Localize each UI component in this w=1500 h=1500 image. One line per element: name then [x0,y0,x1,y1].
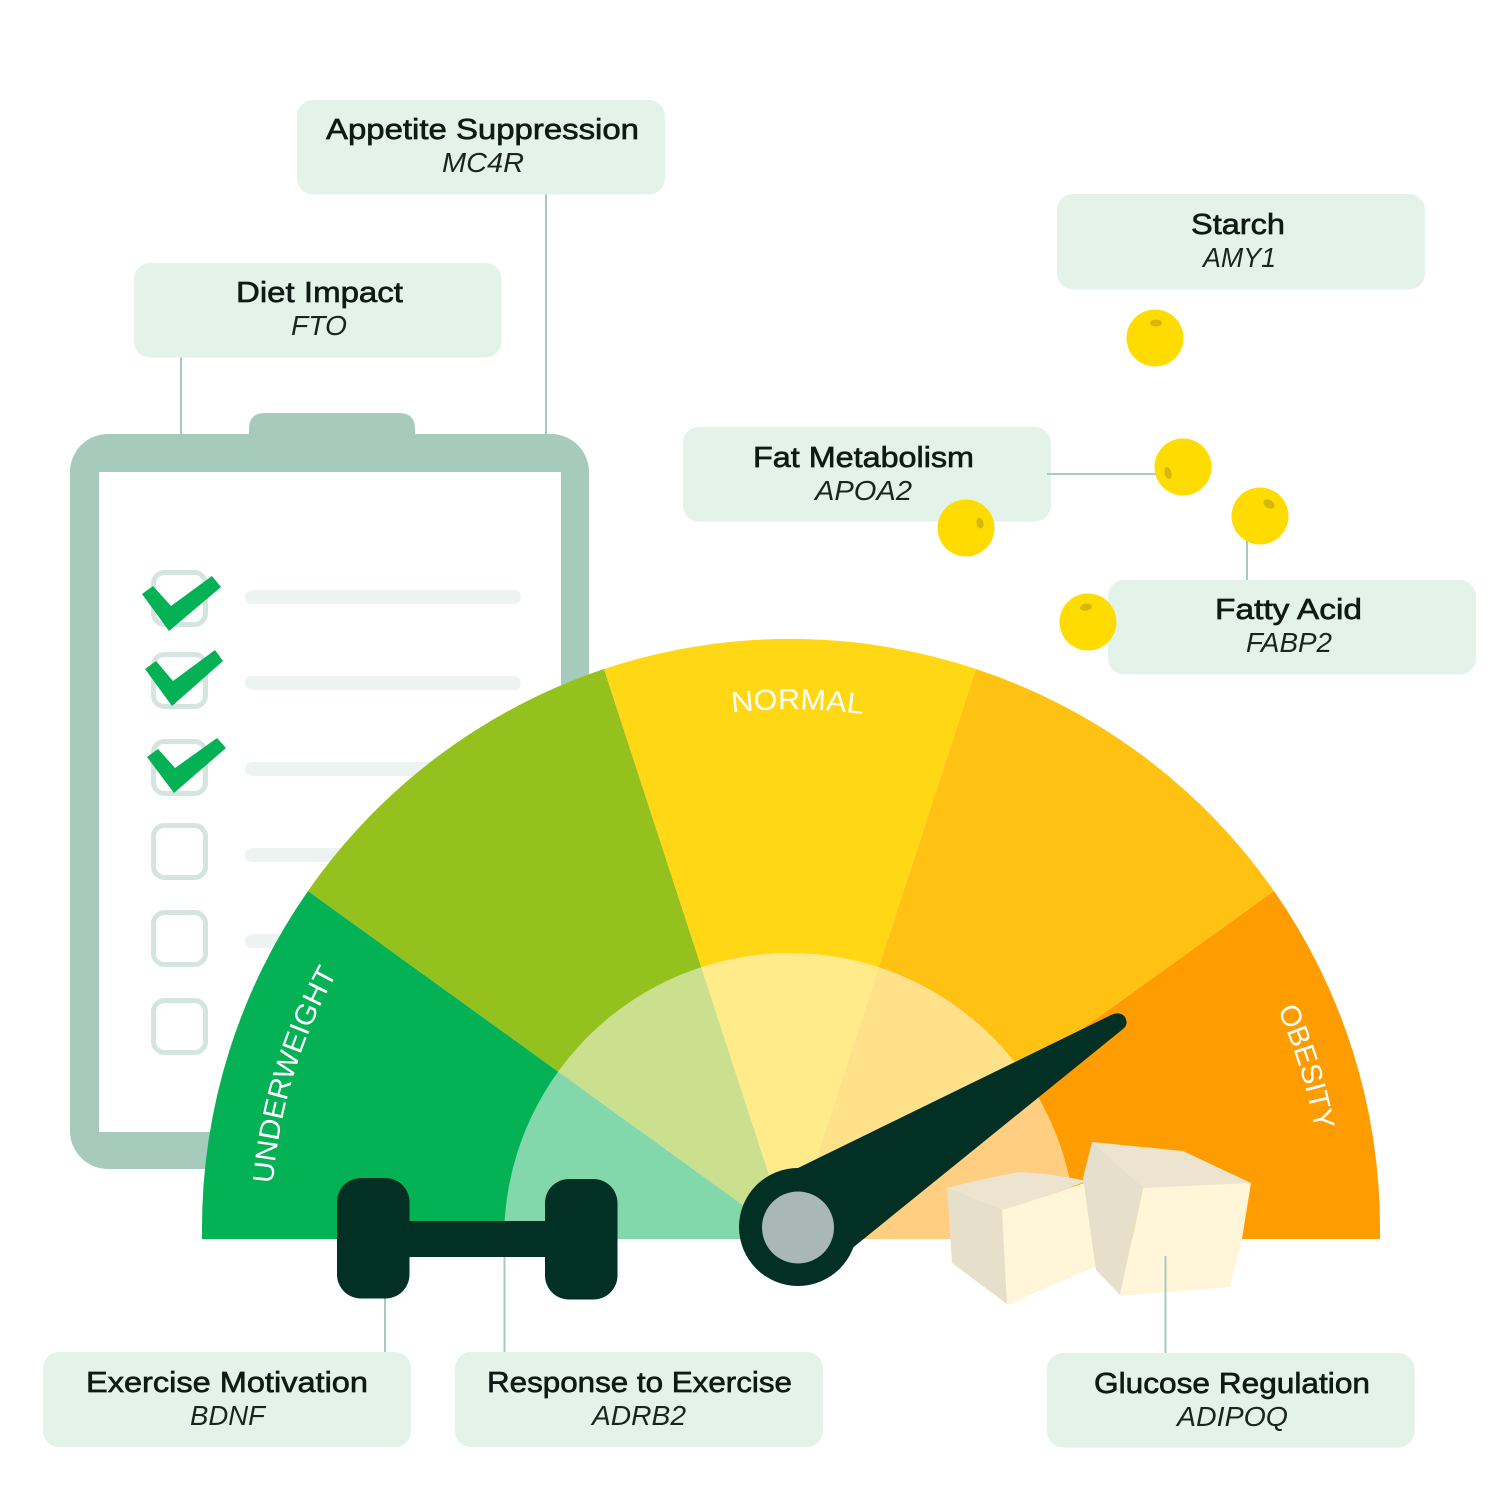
gauge inner highlight [504,953,1072,1239]
leader line: fat metabolism [1047,473,1160,475]
label: response to exercise: Response to Exercise [487,1367,792,1399]
gauge segment: low normal [308,669,790,1239]
label: fat metabolism: APOA2 [813,475,912,506]
leader line: response to exercise [504,1250,506,1352]
label: response to exercise [455,1352,823,1447]
icon: check marks [142,576,226,793]
label: diet impact: Diet Impact [236,277,403,309]
gauge segment: overweight [816,669,1274,1160]
label: diet impact [134,263,502,358]
gauge label: obesity: OBESITY [1280,1006,1335,1126]
label: fat metabolism [683,427,1051,522]
label: exercise motivation [43,1352,411,1447]
leader line: diet impact [180,357,182,436]
leader line: appetite suppression [545,194,547,436]
label: starch: AMY1 [1201,242,1276,273]
leader line: exercise motivation [384,1295,386,1352]
label: exercise motivation: Exercise Motivation [86,1367,368,1399]
label: starch [1057,194,1425,290]
gauge segment: underweight [202,891,790,1239]
label: response to exercise: ADRB2 [590,1400,686,1431]
icon: soybeans [938,310,1288,650]
icon: dumbbell [337,1178,618,1300]
needle pointer [798,1013,1127,1250]
label: appetite suppression [297,100,665,194]
icon: tofu cubes [947,1142,1251,1304]
gauge label: normal: NORMAL [732,689,862,714]
clipboard sheet [99,472,561,1132]
label: fat metabolism: Fat Metabolism [753,442,974,474]
leader line: fatty acid [1246,535,1248,580]
label: fatty acid: FABP2 [1246,627,1332,658]
leader line: glucose regulation [1164,1256,1166,1354]
label: starch: Starch [1191,209,1285,241]
label: appetite suppression: Appetite Suppression [326,114,639,146]
needle hub [739,1168,857,1286]
label: appetite suppression: MC4R [442,147,524,178]
label: glucose regulation [1047,1353,1414,1448]
gauge segment: normal [604,638,976,1176]
gauge segment: obesity [864,891,1380,1239]
gauge needle [739,1013,1127,1286]
clipboard frame [70,434,589,1169]
needle hub centre [762,1192,834,1264]
label: exercise motivation: BDNF [190,1400,267,1431]
gauge chart [202,638,1380,1239]
label: glucose regulation: Glucose Regulation [1094,1368,1370,1400]
label: fatty acid [1108,580,1476,674]
checklist rows [154,572,521,1052]
label: diet impact: FTO [291,310,347,341]
panel: clipboard [70,413,589,1169]
label: glucose regulation: ADIPOQ [1175,1401,1288,1432]
label: fatty acid: Fatty Acid [1215,594,1362,626]
gauge label: underweight: UNDERWEIGHT [253,964,334,1181]
clipboard tab [249,413,415,440]
